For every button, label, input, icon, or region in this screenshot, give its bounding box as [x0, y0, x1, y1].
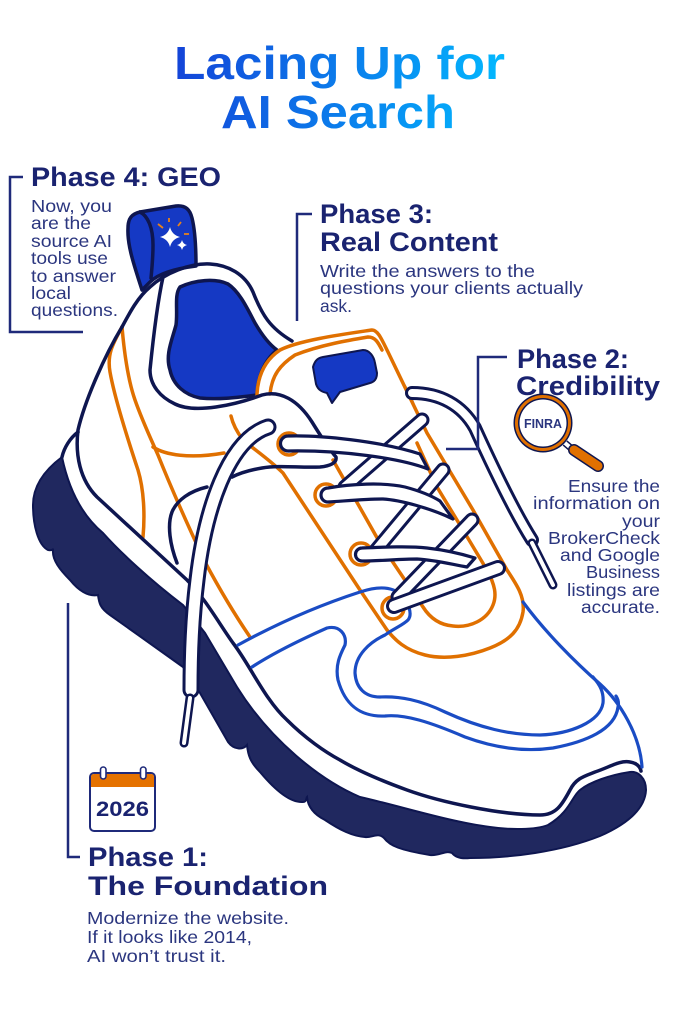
- left loose lace: [184, 427, 268, 743]
- panel: phase 4 GEO: source AI: [31, 231, 112, 251]
- panel: phase 2 credibility: information on: [533, 493, 660, 513]
- panel: phase 3 real content: Real Content: [320, 227, 498, 257]
- icon: magnifying glass: [514, 394, 598, 466]
- icon: calendar 2026: 2026: [96, 798, 149, 821]
- panel: phase 1 foundation: [68, 603, 328, 966]
- sole: [33, 457, 646, 858]
- saddle left: [170, 487, 207, 563]
- panel: phase 4 GEO: are the: [31, 213, 91, 233]
- icon: calendar 2026: [90, 767, 155, 831]
- panel: phase 3 real content: questions your clients actually: [320, 278, 583, 298]
- blue lining: [168, 280, 277, 399]
- title: AI Search: [221, 86, 455, 138]
- upper outline: [77, 327, 641, 815]
- panel: phase 2 credibility: Ensure the: [568, 476, 660, 496]
- collar inner edge and saddle: [150, 277, 336, 477]
- tab: pull loop: [128, 206, 196, 290]
- panel: phase 2 credibility: and Google: [560, 545, 660, 565]
- panel: phase 4 GEO: [10, 162, 221, 332]
- icon: speech bubble: [313, 350, 377, 403]
- panel: phase 2 credibility: Business: [586, 562, 660, 582]
- tongue and lacing panel: [231, 330, 523, 657]
- panel: phase 4 GEO: tools use: [31, 248, 108, 268]
- panel: phase 1 foundation: The Foundation: [88, 871, 328, 901]
- panel: phase 4 GEO: Now, you: [31, 196, 112, 216]
- panel: phase 3 real content: ask.: [320, 296, 352, 316]
- panel: phase 4 GEO: Phase 4: GEO: [31, 162, 221, 192]
- midsole heel edge: [62, 432, 78, 457]
- panel: phase 1 foundation: Modernize the website.: [87, 908, 289, 928]
- right loose lace: [412, 393, 553, 585]
- panel: phase 2 credibility: [446, 344, 660, 617]
- panel: phase 3 real content: Write the answers to the: [320, 261, 535, 281]
- title: Lacing Up for: [174, 37, 505, 89]
- panel: phase 1 foundation: AI won’t trust it.: [87, 946, 226, 966]
- tongue navy edge: [392, 372, 417, 415]
- panel: phase 2 credibility: Phase 2:: [517, 344, 629, 374]
- panel: phase 4 GEO: local: [31, 283, 71, 303]
- toe blue lines: [238, 588, 642, 767]
- panel: phase 1 foundation: Phase 1:: [88, 842, 208, 872]
- collar outer edge: [122, 264, 292, 341]
- title: [174, 37, 505, 138]
- panel: phase 2 credibility: your: [622, 511, 660, 531]
- panel: phase 2 credibility: Credibility: [516, 371, 660, 401]
- panel: phase 2 credibility: accurate.: [581, 597, 660, 617]
- panel: phase 4 GEO: to answer: [31, 266, 116, 286]
- panel: phase 3 real content: Phase 3:: [320, 199, 433, 229]
- icon: magnifying glass: FINRA: [524, 416, 563, 431]
- panel: phase 3 real content: [297, 199, 583, 321]
- icon: AI sparkle: [158, 218, 189, 250]
- heel orange stitching: [109, 327, 250, 637]
- panel: phase 1 foundation: If it looks like 2014,: [87, 927, 252, 947]
- laces across: [280, 420, 498, 606]
- panel: phase 2 credibility: listings are: [567, 580, 660, 600]
- panel: phase 4 GEO: questions.: [31, 300, 118, 320]
- eyelets: [278, 433, 404, 619]
- panel: phase 2 credibility: BrokerCheck: [548, 528, 660, 548]
- shoe illustration: [33, 206, 646, 858]
